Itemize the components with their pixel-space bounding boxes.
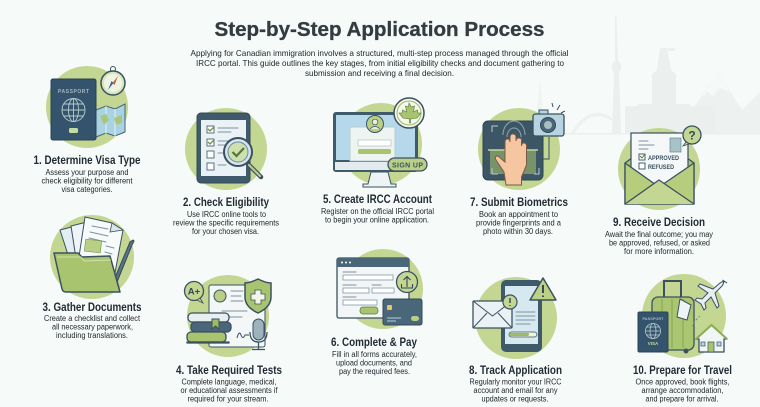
panel: step 10 prepare for travel [633, 274, 732, 404]
icon: passport, compass and map: PASSPORT [58, 89, 89, 95]
panel: step 4 take required tests [176, 275, 282, 404]
description: visa categories. [62, 185, 112, 194]
intro paragraph: submission and receiving a final decision. [305, 68, 454, 78]
description [476, 210, 562, 236]
description [470, 378, 562, 404]
icon: phone with email and alert [473, 277, 557, 359]
description: Assess your purpose and [46, 168, 128, 177]
description [44, 314, 141, 340]
heading: 5. Create IRCC Account [323, 192, 432, 206]
icon: monitor with sign-up form and maple leaf badge: SIGN UP [392, 162, 423, 170]
icon: envelope with approved/refused letter: ? [688, 128, 696, 142]
description: photo within 30 days. [483, 227, 553, 236]
description: Fill in all forms accurately, [332, 350, 417, 359]
heading: 2. Check Eligibility [183, 195, 269, 209]
panel: step 3 gather documents [42, 215, 142, 340]
intro paragraph [190, 48, 569, 78]
heading: 1. Determine Visa Type [34, 153, 141, 167]
panel: step 2 check eligibility [173, 108, 279, 236]
description: arrange accommodation, [642, 386, 724, 395]
icon: online form, upload badge and credit card [337, 249, 423, 329]
description: Once approved, book flights, [636, 378, 730, 386]
description: Regularly monitor your IRCC [470, 378, 562, 386]
description: review the specific requirements [173, 218, 279, 228]
icon: suitcase, passport, plane and house [638, 274, 727, 358]
icon: fingerprint scanner with hand and camera [478, 103, 565, 190]
description: for more information. [624, 247, 694, 256]
description: Use IRCC online tools to [187, 210, 267, 219]
description: check eligibility for different [42, 176, 133, 186]
panel: step 8 track application [469, 277, 562, 404]
panel: step 6 complete and pay [331, 249, 423, 376]
heading: 7. Submit Biometrics [470, 195, 568, 209]
intro paragraph: IRCC portal. This guide outlines the key stages, from initial eligibility checks and document gathering to [196, 58, 564, 68]
panel: step 7 submit biometrics [470, 103, 568, 236]
panel: step 9 receive decision [605, 126, 713, 256]
description [321, 207, 434, 224]
description: Complete language, medical, [182, 378, 276, 386]
heading: 9. Receive Decision [613, 215, 705, 229]
description: upload documents, and [336, 358, 412, 368]
description [636, 378, 730, 404]
description: including translations. [56, 331, 128, 340]
icon: tablet checklist with magnifier [185, 108, 267, 190]
intro paragraph: Applying for Canadian immigration involves a structured, multi-step process managed through the official [190, 48, 569, 58]
description [180, 378, 278, 404]
description: for your chosen visa. [192, 227, 259, 236]
description [173, 210, 279, 236]
description: be approved, refused, or asked [609, 238, 710, 248]
panel: step 1 determine visa type [34, 66, 141, 194]
description: to begin your online application. [325, 216, 429, 224]
heading: 4. Take Required Tests [176, 363, 282, 377]
icon: envelope with approved/refused letter: REFUSED [648, 165, 675, 171]
description: updates or requests. [482, 394, 548, 404]
icon: envelope with approved/refused letter [618, 126, 701, 210]
description: Await the final outcome; you may [605, 230, 713, 239]
icon: suitcase, passport, plane and house: PASSPORT [642, 317, 664, 321]
description: Register on the official IRCC portal [321, 207, 434, 216]
title: Step-by-Step Application Process [214, 19, 544, 41]
background skyline: Canadian landmarks [536, 16, 760, 134]
description [332, 350, 417, 376]
icon: envelope with approved/refused letter: APPROVED [648, 156, 680, 162]
heading: 3. Gather Documents [42, 300, 142, 314]
panel: step 5 create IRCC account [321, 98, 434, 224]
icon: certificate, books, shield and microphone: A+ [188, 286, 201, 298]
description: account and email for any [474, 386, 558, 395]
description [42, 168, 133, 194]
description: and prepare for arrival. [646, 394, 718, 404]
description: all necessary paperwork, [52, 322, 133, 332]
description: Create a checklist and collect [44, 314, 141, 323]
description: provide fingerprints and a [476, 218, 562, 228]
icon: folder of documents and pen [50, 215, 134, 299]
description: required for your stream. [188, 394, 268, 404]
description: or educational assessments if [180, 386, 278, 395]
description [605, 230, 713, 256]
heading: 8. Track Application [469, 363, 562, 377]
description: pay the required fees. [339, 367, 410, 376]
heading: 6. Complete & Pay [331, 335, 417, 349]
icon: suitcase, passport, plane and house: VISA [648, 341, 659, 346]
description: Book an appointment to [479, 210, 559, 219]
heading: 10. Prepare for Travel [633, 363, 732, 377]
